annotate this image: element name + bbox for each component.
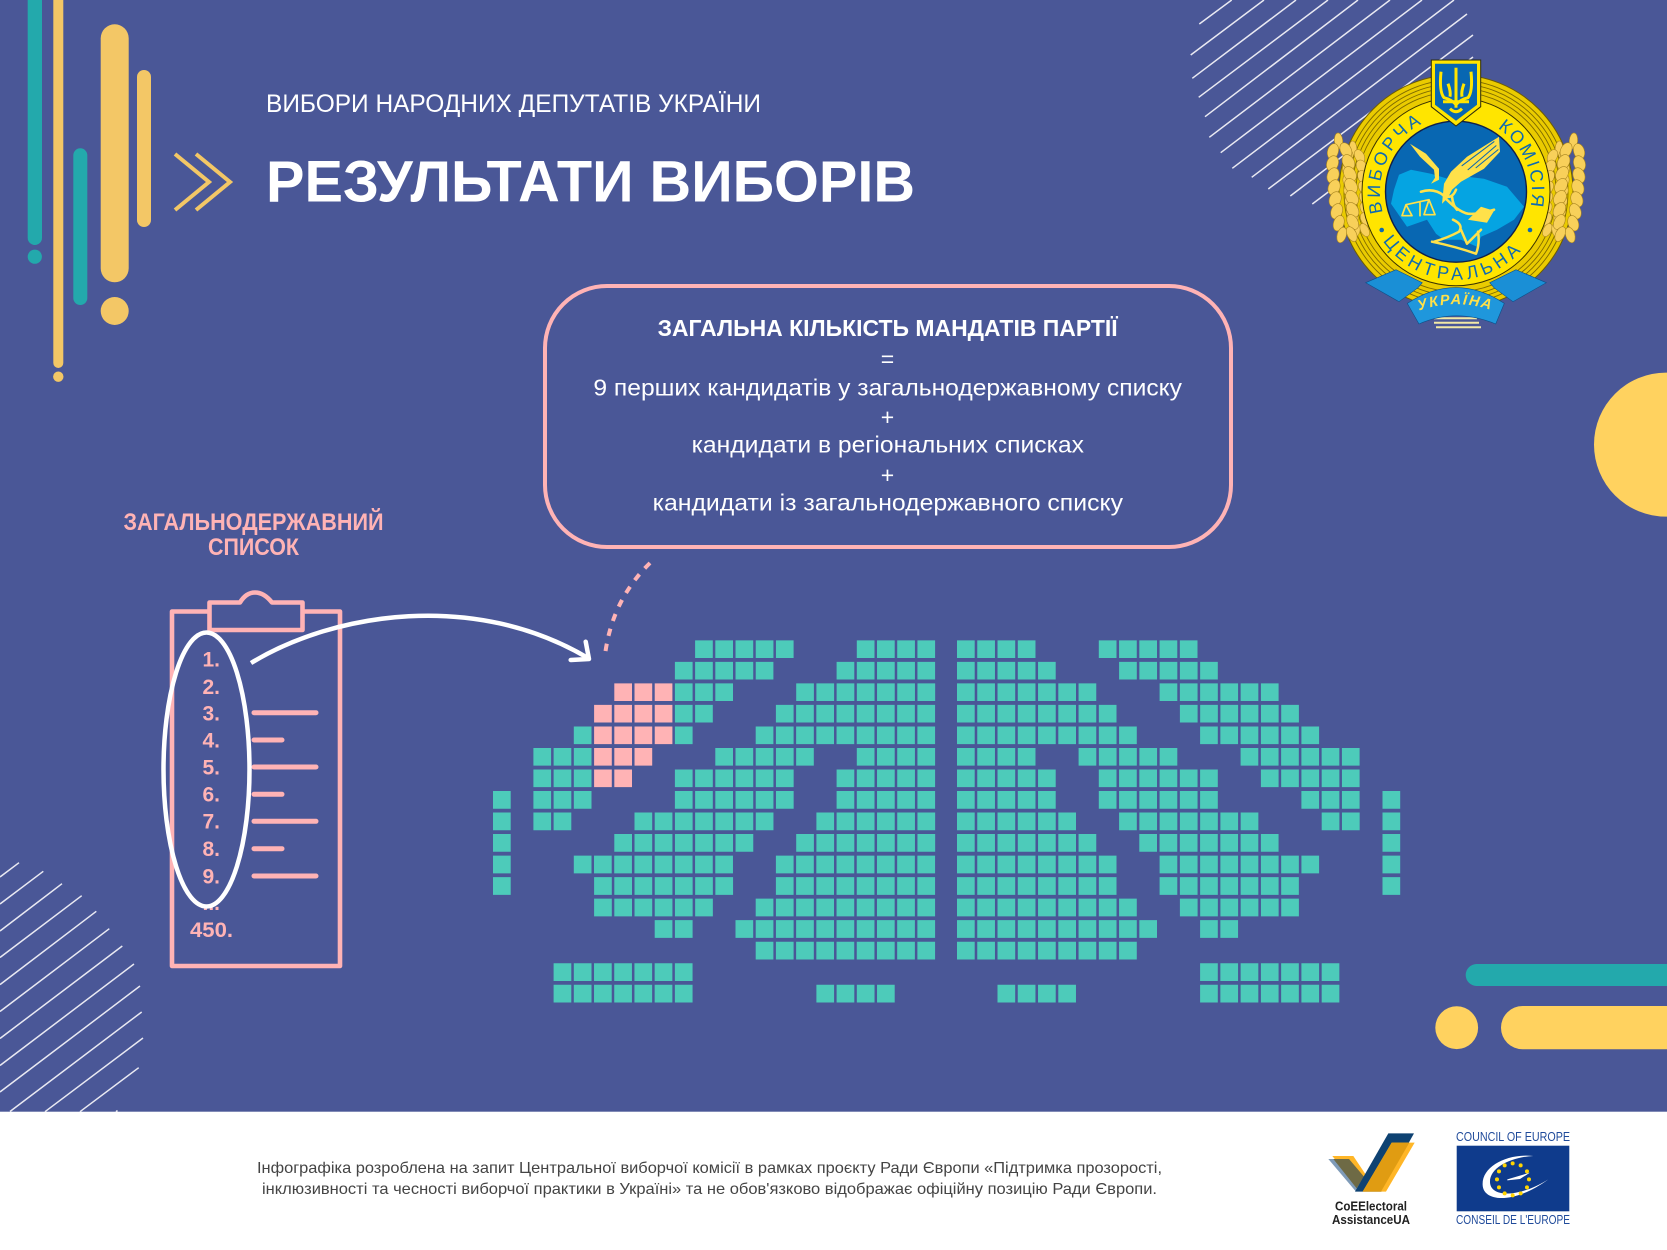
- wheat ears: [1321, 131, 1591, 245]
- list numbers: 8.: [202, 838, 220, 861]
- seats right side: [957, 649, 1400, 994]
- formula line 3: кандидати із загальнодержавного списку: [653, 490, 1124, 516]
- footer disclaimer text: інклюзивності та чесності виборчої практики в Україні» та не обов'язково відображає офіційну позицію Ради Європи.: [262, 1181, 1157, 1198]
- logo: CoE Electoral Assistance UA: CoEElectoral: [1335, 1199, 1407, 1214]
- logo: Central Election Commission emblem: [1326, 60, 1586, 328]
- list numbers: 6.: [202, 784, 220, 807]
- icon: clipboard with numbered list: [172, 592, 340, 966]
- logo: Council of Europe: [1456, 1130, 1570, 1227]
- dashed connector from callout to seats: [605, 563, 650, 655]
- wheat rays ring: [1339, 75, 1573, 309]
- icon: double chevron: [175, 154, 230, 210]
- decorative bars bottom-right: [1435, 964, 1667, 1049]
- list numbers: ...: [202, 892, 220, 915]
- list numbers: 9.: [202, 865, 220, 888]
- map of Ukraine: [1391, 170, 1524, 247]
- list numbers: 7.: [202, 811, 220, 834]
- seats left side: [493, 649, 935, 994]
- list numbers: 4.: [202, 729, 220, 752]
- chart: parliament seats: [493, 649, 1400, 994]
- list numbers: 450.: [190, 919, 233, 942]
- decorative bars top-left: [28, 0, 151, 382]
- ribbon: [1365, 269, 1547, 328]
- list heading: ЗАГАЛЬНОДЕРЖАВНИЙ: [124, 508, 384, 536]
- plus sign: +: [881, 462, 894, 488]
- formula line 1: 9 перших кандидатів у загальнодержавному списку: [593, 374, 1183, 400]
- subtitle: ВИБОРИ НАРОДНИХ ДЕПУТАТІВ УКРАЇНИ: [266, 90, 761, 118]
- footer panel: [0, 1112, 1667, 1250]
- seats highlighted pink: [594, 692, 672, 778]
- bird and scales figure: [1402, 137, 1500, 254]
- logo: CoE Electoral Assistance UA: AssistanceUA: [1332, 1212, 1411, 1227]
- highlight ellipse around first nine: [164, 632, 250, 906]
- callout: formula panel: [545, 286, 1231, 547]
- list numbers: 3.: [202, 703, 220, 726]
- shield with trident: [1431, 60, 1481, 126]
- blue centre disc: [1386, 121, 1526, 262]
- list numbers: [190, 649, 233, 942]
- yellow inscription ring: [1362, 98, 1550, 286]
- decorative yellow half circle right: [1594, 373, 1667, 517]
- footer disclaimer text: [257, 1160, 1162, 1198]
- ring inscription: КОМІСІЯ: [1499, 119, 1544, 206]
- list heading: [124, 508, 384, 561]
- list numbers: 2.: [202, 676, 220, 699]
- arrow from list to seats: [251, 616, 589, 663]
- logo: CoE Electoral Assistance UA: [1328, 1133, 1415, 1227]
- list lines: [254, 713, 316, 876]
- list heading: СПИСОК: [208, 534, 299, 561]
- logo: Council of Europe: COUNCIL OF EUROPE: [1456, 1130, 1570, 1144]
- equals sign: =: [881, 346, 894, 372]
- formula line 2: кандидати в регіональних списках: [692, 432, 1085, 458]
- list numbers: 5.: [202, 757, 220, 780]
- logo: Council of Europe: CONSEIL DE L'EUROPE: [1456, 1213, 1570, 1227]
- title: РЕЗУЛЬТАТИ ВИБОРІВ: [266, 150, 915, 215]
- ribbon: УКРАЇНА: [1418, 292, 1490, 310]
- ring inscription: ВИБОРЧА: [1368, 116, 1422, 214]
- plus sign: +: [881, 404, 894, 430]
- footer disclaimer text: Інфографіка розроблена на запит Центральної виборчої комісії в рамках проєкту Ради Європи «Підтримка прозорості,: [257, 1160, 1162, 1177]
- ring inscription: [1368, 116, 1544, 280]
- ring inscription: ЦЕНТРАЛЬНА: [1384, 234, 1521, 280]
- list numbers: 1.: [202, 649, 220, 672]
- callout heading: ЗАГАЛЬНА КІЛЬКІСТЬ МАНДАТІВ ПАРТІЇ: [658, 315, 1118, 341]
